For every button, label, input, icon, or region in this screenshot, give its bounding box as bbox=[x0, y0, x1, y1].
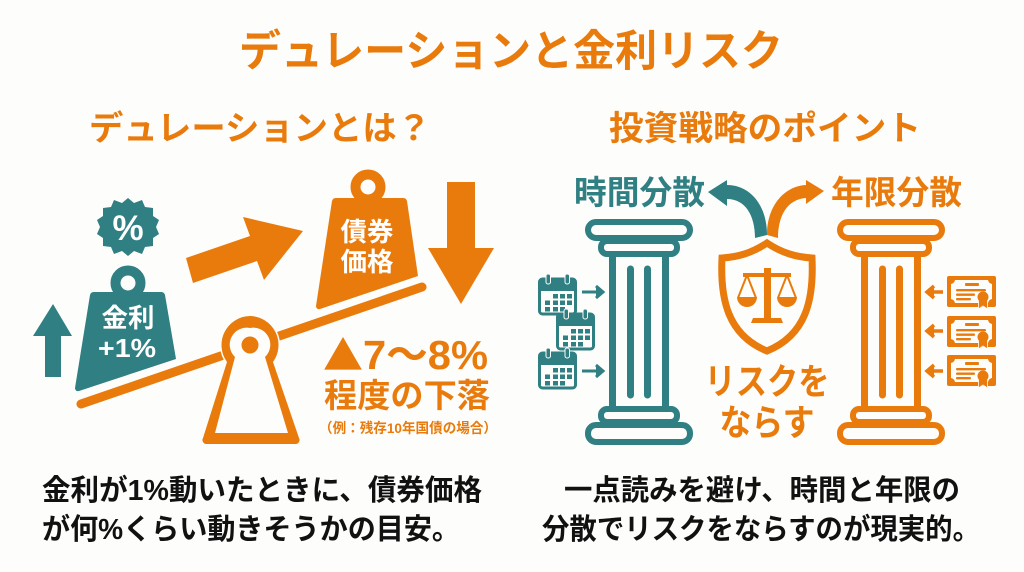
weight: interest rate: +1% bbox=[98, 333, 156, 363]
callout: decline: （例：残存10年国債の場合） bbox=[319, 420, 497, 436]
text block: left explanation: が何%くらい動きそうかの目安。 bbox=[42, 512, 460, 546]
arrows: calendars to pillar bbox=[582, 286, 603, 377]
icon: percent badge bbox=[97, 198, 159, 256]
label: maturity diversification: 年限分散 bbox=[831, 174, 962, 211]
pillar: teal bbox=[588, 222, 690, 442]
label: smooth risk bbox=[704, 361, 830, 443]
text block: left explanation: 金利が1%動いたときに、債券価格 bbox=[42, 473, 482, 507]
heading: what is duration: デュレーションとは？ bbox=[89, 109, 431, 148]
weight: interest rate bbox=[75, 270, 176, 391]
icons: calendars bbox=[540, 274, 594, 388]
weight: bond price: 価格 bbox=[340, 247, 394, 277]
callout: decline: 程度の下落 bbox=[324, 377, 490, 414]
icon: shield with scales bbox=[722, 243, 812, 351]
seesaw fulcrum bbox=[202, 316, 300, 444]
arrow: rate to price bbox=[186, 217, 303, 283]
label: time diversification: 時間分散 bbox=[574, 174, 705, 211]
icons: certificates bbox=[947, 276, 996, 388]
arrow: teal curve bbox=[708, 180, 767, 238]
label: smooth risk: リスクを bbox=[704, 361, 830, 402]
panel: strategy diagram bbox=[540, 174, 996, 443]
icon: down arrow bbox=[428, 182, 494, 304]
weight: bond price: 債券 bbox=[340, 217, 394, 247]
icon: up arrow bbox=[33, 304, 72, 377]
text block: right explanation: 一点読みを避け、時間と年限の bbox=[564, 474, 960, 507]
callout: decline: ▲ bbox=[323, 324, 363, 382]
text block: right explanation: 分散でリスクをならすのが現実的。 bbox=[542, 512, 980, 546]
icon: percent badge: % bbox=[112, 209, 144, 248]
callout: decline: 7〜8% bbox=[363, 332, 488, 378]
heading: investment strategy points: 投資戦略のポイント bbox=[609, 110, 921, 148]
callout: decline bbox=[319, 324, 497, 436]
arrow: orange curve bbox=[767, 180, 824, 238]
panel: seesaw diagram bbox=[33, 174, 497, 444]
text block: right explanation bbox=[542, 474, 980, 546]
seesaw beam bbox=[81, 287, 422, 404]
text block: left explanation bbox=[42, 473, 482, 546]
weight: interest rate: 金利 bbox=[102, 303, 154, 333]
pillar: orange bbox=[840, 222, 942, 442]
arrows: certificates to pillar bbox=[927, 286, 943, 377]
title: デュレーションと金利リスク bbox=[239, 27, 783, 76]
weight: bond price bbox=[316, 174, 418, 309]
label: smooth risk: ならす bbox=[720, 402, 814, 443]
